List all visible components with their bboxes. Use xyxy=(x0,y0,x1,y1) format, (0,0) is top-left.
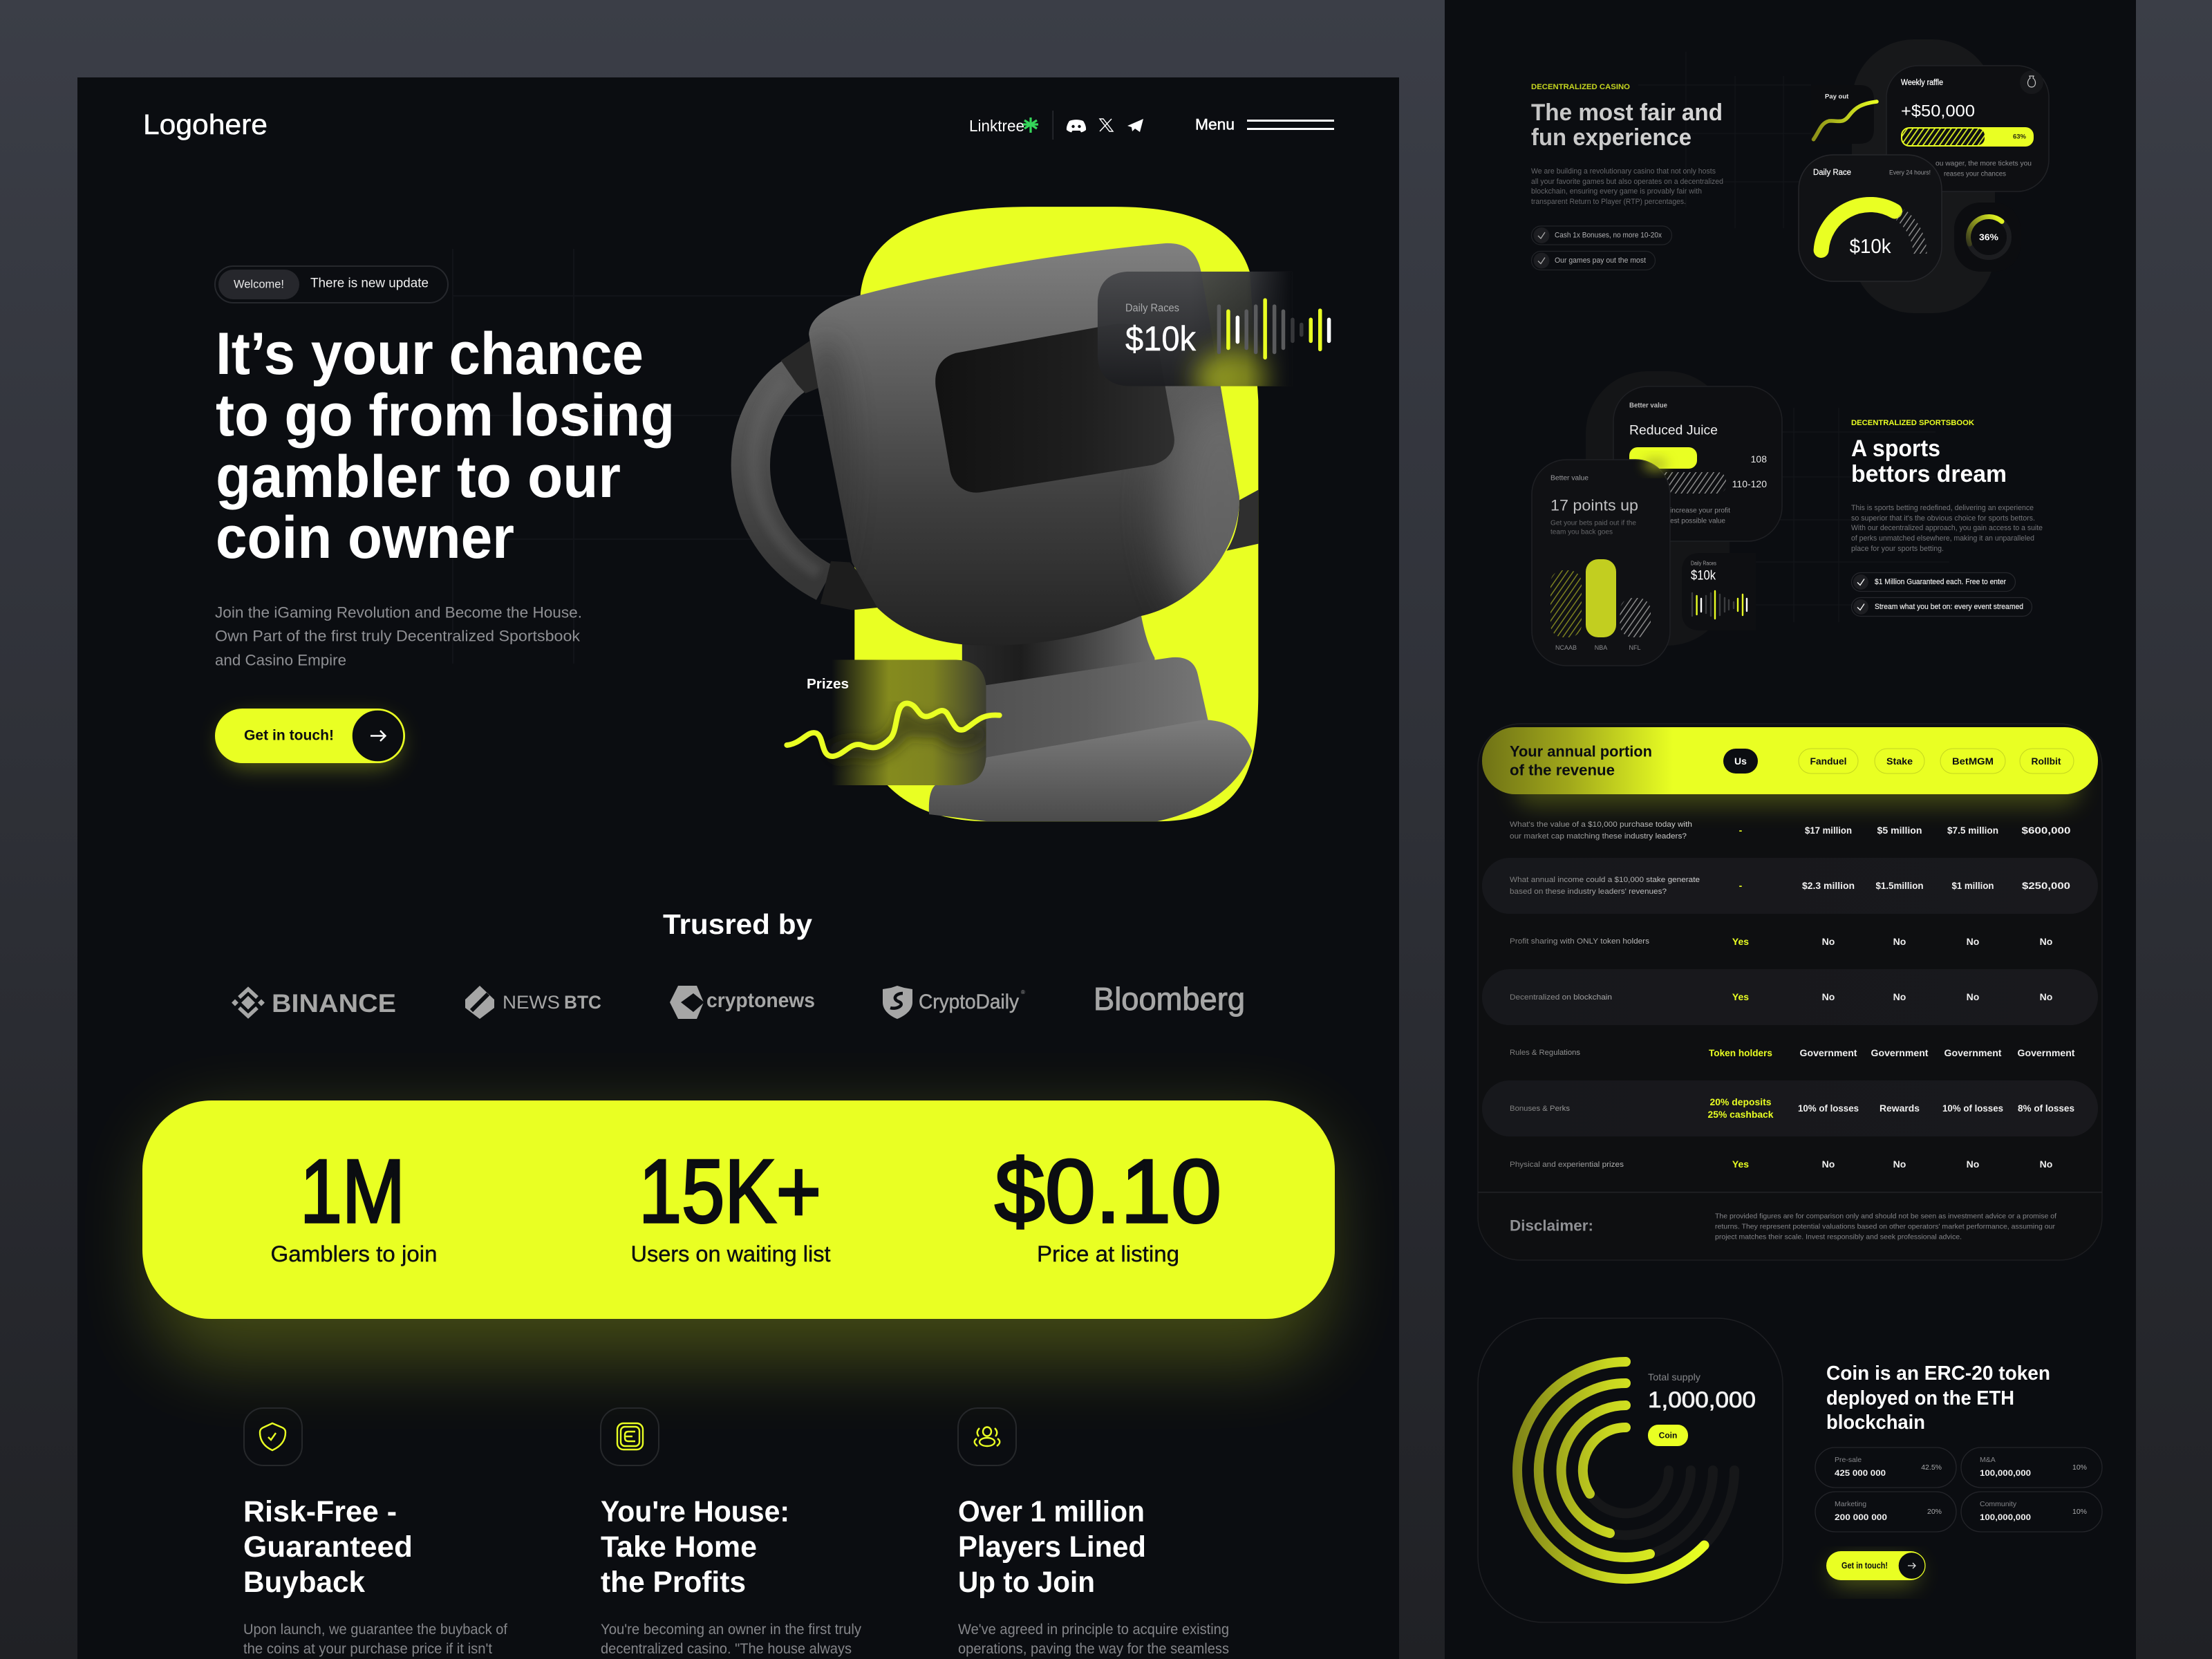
sportsbook paragraph: of perks unmatched elsewhere, making it an unparalleled xyxy=(1851,534,2034,543)
sportsbook heading xyxy=(1851,435,2007,487)
feature: you're house: decentralized casino. "The house always xyxy=(601,1640,852,1657)
casino pill: bonuses: Cash 1x Bonuses, no more 10-20x xyxy=(1555,231,1662,239)
gauge xyxy=(1821,205,1920,254)
sportsbook tag: DECENTRALIZED SPORTSBOOK xyxy=(1851,419,1974,427)
backdrop shape xyxy=(1586,371,1730,646)
prizes wave line xyxy=(787,703,1000,756)
feature: you're house: Take Home xyxy=(601,1530,757,1564)
card: small daily races: $10k xyxy=(1691,568,1716,583)
competitor column values: 10% of losses xyxy=(1942,1103,2003,1114)
card: 17 points up: Get your bets paid out if the xyxy=(1550,520,1636,527)
us column values: Yes xyxy=(1732,936,1749,947)
competitor column values: No xyxy=(2040,991,2052,1002)
logo: cryptodaily xyxy=(883,986,1025,1019)
daily races label: $10k xyxy=(1125,319,1197,358)
linktree link: Linktree xyxy=(969,117,1024,135)
disclaimer xyxy=(1510,1212,2056,1241)
sportsbook pill: guaranteed: $1 Million Guaranteed each. Free to enter xyxy=(1875,578,2006,586)
row labels: our market cap matching these industry leaders? xyxy=(1510,832,1687,841)
logo: newsbtc xyxy=(465,986,601,1019)
disclaimer: The provided figures are for comparison only and should not be seen as investment advice or a promise of xyxy=(1715,1212,2056,1221)
update badge: There is new update xyxy=(310,276,429,290)
feature: one million players: Players Lined xyxy=(958,1530,1146,1564)
backdrop shape xyxy=(1852,39,1995,313)
table header glow xyxy=(1514,764,2081,807)
competitor column values: 8% of losses xyxy=(2018,1103,2074,1114)
competitor column values: $7.5 million xyxy=(1947,825,1998,836)
card: reduced juice: Better value xyxy=(1629,402,1667,409)
icon: x xyxy=(1100,119,1113,131)
token heading xyxy=(1826,1362,2050,1434)
allocation: m&a: M&A xyxy=(1980,1456,1996,1464)
table header: Stake xyxy=(1886,756,1913,767)
row labels: Physical and experiential prizes xyxy=(1510,1161,1624,1169)
hero description: Own Part of the first truly Decentralized Sportsbook xyxy=(215,628,581,644)
card: donut progress: 36% xyxy=(1979,232,1998,242)
bar chart: NBA xyxy=(1595,644,1607,651)
stats panel xyxy=(142,1100,1335,1319)
competitor column values: $17 million xyxy=(1805,825,1852,836)
bar chart: NFL xyxy=(1629,644,1641,651)
us column values xyxy=(1707,825,1774,1170)
card: weekly raffle: +$50,000 xyxy=(1901,102,1975,120)
stat: waiting list: Users on waiting list xyxy=(630,1241,831,1266)
allocation: pre-sale: 42.5% xyxy=(1921,1463,1942,1472)
allocation: marketing xyxy=(1815,1492,1956,1532)
daily races label: Daily Races xyxy=(1125,303,1179,314)
competitor column values: No xyxy=(2040,1159,2052,1170)
card: small daily races xyxy=(1682,553,1756,630)
cta button small: Get in touch! xyxy=(1841,1561,1888,1571)
sportsbook paragraph: This is sports betting redefined, delivering an experience xyxy=(1851,504,2034,512)
competitor column values: $250,000 xyxy=(2022,880,2070,891)
equalizer bars xyxy=(1219,300,1329,357)
ring tracks xyxy=(1590,1470,1734,1554)
update badge: Welcome! xyxy=(234,278,284,290)
sportsbook pill: stream xyxy=(1851,597,2032,617)
competitor column values: No xyxy=(1822,1159,1835,1170)
cta button small xyxy=(1826,1551,1925,1586)
hero heading: coin owner xyxy=(216,505,514,571)
feature: you're house: the Profits xyxy=(601,1566,746,1599)
section: sportsbook copy xyxy=(1851,419,2043,617)
raffle progress bar: 63% xyxy=(2013,133,2027,141)
sportsbook paragraph xyxy=(1851,504,2043,553)
feature: risk-free buyback: Buyback xyxy=(243,1566,365,1599)
allocation: community: 10% xyxy=(2072,1508,2087,1516)
row labels: based on these industry leaders' revenues? xyxy=(1510,888,1667,896)
allocation: m&a xyxy=(1961,1447,2102,1488)
menu xyxy=(1196,119,1334,130)
sportsbook paragraph: so superior that it's the obvious choice for sports bettors. xyxy=(1851,514,2035,523)
casino tag: DECENTRALIZED CASINO xyxy=(1531,83,1630,91)
card: token supply chart: 1,000,000 xyxy=(1648,1387,1756,1412)
allocation: marketing: Marketing xyxy=(1835,1500,1866,1508)
casino pill: payouts: Our games pay out the most xyxy=(1555,256,1646,265)
table rows xyxy=(1482,821,2098,1170)
trophy stem and base xyxy=(929,608,1252,821)
glass card: daily races xyxy=(1098,272,1292,407)
stat: waiting list: 15K+ xyxy=(639,1141,821,1241)
table header: Rollbit xyxy=(2031,756,2061,767)
icon: money bag xyxy=(2020,71,2043,94)
background grid lines xyxy=(453,249,857,664)
logo: Logohere xyxy=(143,109,268,140)
card: token supply chart: Total supply xyxy=(1648,1371,1700,1382)
stat: gamblers: 1M xyxy=(300,1141,405,1241)
allocation: marketing: 200 000 000 xyxy=(1835,1512,1887,1522)
card: reduced juice: 108 xyxy=(1751,453,1767,465)
yellow backdrop xyxy=(854,207,1258,821)
competitor column values: $600,000 xyxy=(2021,825,2071,836)
card: 17 points up xyxy=(1532,458,1670,666)
allocation: m&a: 10% xyxy=(2072,1463,2087,1472)
allocation: community xyxy=(1961,1492,2102,1532)
row labels: What annual income could a $10,000 stake generate xyxy=(1510,876,1700,884)
card: weekly raffle: Weekly raffle xyxy=(1901,79,1943,87)
competitor column values: $1.5million xyxy=(1876,880,1923,891)
competitor column values: No xyxy=(1822,936,1835,947)
casino paragraph xyxy=(1531,167,1723,206)
card: weekly raffle: ou wager, the more tickets you xyxy=(1936,160,2032,167)
linktree link xyxy=(971,118,1038,133)
us column values: Yes xyxy=(1732,1159,1749,1170)
card: weekly raffle: reases your chances xyxy=(1944,170,2006,178)
menu: Menu xyxy=(1195,116,1235,133)
hero description: and Casino Empire xyxy=(215,651,346,669)
card: daily race: $10k xyxy=(1850,236,1891,258)
logo: cryptonews: cryptonews xyxy=(706,989,815,1012)
panel: right column xyxy=(1445,0,2136,1659)
competitor column values: Government xyxy=(1944,1047,2002,1058)
row labels: Bonuses & Perks xyxy=(1510,1105,1571,1113)
row labels xyxy=(1510,821,1700,1169)
feature: you're house: You're becoming an owner in the first truly xyxy=(601,1621,861,1638)
allocation: community: Community xyxy=(1980,1500,2017,1508)
coin badge: Coin xyxy=(1659,1431,1677,1441)
cta button: Get in touch! xyxy=(244,727,334,744)
allocation: marketing: 20% xyxy=(1927,1508,1942,1516)
hero description xyxy=(215,604,582,669)
card: reduced juice xyxy=(1613,386,1782,541)
table header: BetMGM xyxy=(1952,756,1994,767)
coin badge xyxy=(1648,1425,1688,1446)
background grid lines xyxy=(1638,52,1949,622)
card: 17 points up: team you back goes xyxy=(1550,528,1613,536)
table header: of the revenue xyxy=(1510,762,1615,778)
icon: discord xyxy=(1067,120,1086,133)
section: casino copy xyxy=(1531,83,1723,270)
stat: gamblers xyxy=(271,1141,437,1266)
disclaimer: project matches their scale. Invest responsibly and seek professional advice. xyxy=(1715,1233,1962,1241)
table header: Your annual portion xyxy=(1510,742,1652,760)
competitor column values: No xyxy=(1822,991,1835,1002)
casino heading: fun experience xyxy=(1531,124,1691,151)
allocation: pre-sale xyxy=(1815,1447,1956,1488)
trophy illustration xyxy=(751,207,1329,821)
competitor column values: Rewards xyxy=(1880,1103,1920,1114)
us column values: - xyxy=(1739,825,1743,836)
us column values: Yes xyxy=(1732,991,1749,1002)
disclaimer: returns. They represent potential valuations based on other operators' market performance, assuming our xyxy=(1715,1224,2056,1230)
trophy handles xyxy=(751,339,1258,610)
token heading: blockchain xyxy=(1826,1412,1925,1434)
competitor column values: Government xyxy=(1800,1047,1857,1058)
us column values: Token holders xyxy=(1709,1047,1772,1058)
token heading: Coin is an ERC-20 token xyxy=(1826,1362,2050,1385)
sportsbook heading: bettors dream xyxy=(1851,461,2007,487)
us column values: 25% cashback xyxy=(1707,1109,1774,1120)
card: daily race: Daily Race xyxy=(1813,169,1851,177)
row labels: What's the value of a $10,000 purchase today with xyxy=(1510,821,1692,829)
hero heading: It’s your chance xyxy=(216,321,644,387)
allocation: community: 100,000,000 xyxy=(1980,1512,2031,1522)
casino paragraph: We are building a revolutionary casino that not only hosts xyxy=(1531,167,1716,176)
feature: one million players: operations, paving the way for the seamless xyxy=(958,1640,1229,1657)
table header: Fanduel xyxy=(1810,756,1847,767)
logo: binance: BINANCE xyxy=(272,989,396,1018)
feature: you're house xyxy=(601,1408,861,1657)
competitor column values: $2.3 million xyxy=(1802,880,1855,891)
card: reduced juice: Reduced Juice xyxy=(1629,423,1718,438)
icon: coin xyxy=(617,1423,643,1450)
prizes label: Prizes xyxy=(807,677,849,692)
card: donut progress xyxy=(1954,203,2021,272)
competitor column values: No xyxy=(1967,936,1979,947)
icon: shield xyxy=(260,1423,285,1450)
partner logos xyxy=(232,981,1245,1019)
row labels: Profit sharing with ONLY token holders xyxy=(1510,937,1650,946)
card: weekly raffle xyxy=(1886,66,2049,191)
competitor column values xyxy=(1798,825,2075,1170)
casino pill: bonuses xyxy=(1532,226,1671,245)
allocation: m&a: 100,000,000 xyxy=(1980,1468,2031,1478)
casino heading: The most fair and xyxy=(1531,100,1723,126)
cta button xyxy=(215,709,405,767)
sportsbook paragraph: With our decentralized approach, you gain access to a suite xyxy=(1851,524,2043,532)
row labels: Rules & Regulations xyxy=(1510,1049,1581,1057)
casino paragraph: transparent Return to Player (RTP) percentages. xyxy=(1531,198,1686,206)
trophy cup xyxy=(809,243,1239,646)
stat: price: $0.10 xyxy=(995,1141,1221,1241)
sportsbook heading: A sports xyxy=(1851,435,1940,462)
hero heading: gambler to our xyxy=(216,444,621,510)
competitor column values: No xyxy=(1893,991,1906,1002)
section: sportsbook widgets xyxy=(1532,371,1782,666)
feature: one million players: We've agreed in principle to acquire existing xyxy=(958,1621,1229,1638)
card: token supply chart xyxy=(1478,1318,1783,1622)
feature: risk-free buyback: Risk-Free - xyxy=(243,1495,397,1528)
competitor column values: Government xyxy=(1871,1047,1929,1058)
us column values: 20% deposits xyxy=(1710,1096,1772,1107)
token heading: deployed on the ETH xyxy=(1826,1387,2014,1409)
daily races label xyxy=(1125,303,1197,358)
competitor column values: No xyxy=(1967,1159,1979,1170)
panel: main landing page xyxy=(77,77,1399,1659)
competitor column values: No xyxy=(1893,936,1906,947)
competitor column values: Government xyxy=(2017,1047,2075,1058)
competitor column values: No xyxy=(1967,991,1979,1002)
logo: bloomberg: Bloomberg xyxy=(1094,981,1245,1017)
ring arcs xyxy=(1517,1362,1705,1579)
trophy plate xyxy=(935,324,1174,493)
feature: risk-free buyback: Upon launch, we guarantee the buyback of xyxy=(243,1621,507,1638)
feature: one million players: Up to Join xyxy=(958,1566,1095,1599)
stat: price: Price at listing xyxy=(1037,1241,1179,1266)
logo: newsbtc: BTC xyxy=(564,992,601,1013)
card: small daily races: Daily Races xyxy=(1691,560,1716,567)
sportsbook pill: stream: Stream what you bet on: every event streamed xyxy=(1875,603,2023,611)
card: daily race: Every 24 hours! xyxy=(1889,169,1931,177)
update badge xyxy=(215,266,448,303)
disclaimer: Disclaimer: xyxy=(1510,1217,1593,1235)
header navigation xyxy=(143,109,1334,140)
logo: cryptonews xyxy=(670,986,815,1019)
raffle progress bar xyxy=(1901,127,2034,147)
bar chart: NCAAB xyxy=(1555,644,1577,651)
competitor column values: 10% of losses xyxy=(1798,1103,1859,1114)
table header: Us xyxy=(1734,756,1747,767)
comparison table xyxy=(1478,724,2102,1260)
card: reduced juice: est possible value xyxy=(1670,517,1725,525)
hero heading: to go from losing xyxy=(216,382,675,449)
glass card: prizes xyxy=(818,659,986,785)
competitor column values: No xyxy=(1893,1159,1906,1170)
icon: people xyxy=(975,1427,1000,1446)
logo: newsbtc: NEWS xyxy=(503,992,560,1013)
hero heading xyxy=(216,321,675,571)
feature: risk-free buyback: the coins at your purchase price if it isn't xyxy=(243,1640,492,1657)
competitor column values: $5 million xyxy=(1877,825,1922,836)
feature: risk-free buyback xyxy=(243,1408,507,1657)
card: reduced juice: 110-120 xyxy=(1732,478,1767,489)
card: pay out: Pay out xyxy=(1825,93,1849,101)
feature: one million players: Over 1 million xyxy=(958,1495,1145,1528)
icon: telegram xyxy=(1127,119,1143,132)
casino paragraph: blockchain, ensuring every game is provably fair with xyxy=(1531,187,1702,196)
hero description: Join the iGaming Revolution and Become the House. xyxy=(215,604,582,621)
sportsbook paragraph: place for your sports betting. xyxy=(1851,545,1944,553)
section: token copy xyxy=(1815,1362,2102,1586)
card: pay out xyxy=(1811,85,1877,144)
card: 17 points up: 17 points up xyxy=(1550,496,1638,514)
card: 17 points up: Better value xyxy=(1550,474,1588,482)
allocation: pre-sale: 425 000 000 xyxy=(1835,1468,1886,1478)
us column values: - xyxy=(1739,880,1743,891)
casino heading xyxy=(1531,100,1723,151)
allocation: pre-sale: Pre-sale xyxy=(1835,1456,1862,1464)
stat: gamblers: Gamblers to join xyxy=(271,1241,437,1266)
stats panel glow xyxy=(152,1120,1327,1362)
logo: cryptodaily: CryptoDaily xyxy=(919,991,1019,1013)
casino pill: payouts xyxy=(1532,252,1655,270)
feature: you're house: You're House: xyxy=(601,1495,789,1528)
competitor column values: No xyxy=(2040,936,2052,947)
logo: cryptodaily: ® xyxy=(1021,989,1025,995)
row labels: Decentralized on blockchain xyxy=(1510,993,1612,1002)
trusted by heading: Trusred by xyxy=(663,908,812,940)
card: reduced juice: increase your profit xyxy=(1670,507,1730,514)
feature: risk-free buyback: Guaranteed xyxy=(243,1530,413,1564)
feature: one million players xyxy=(958,1408,1229,1657)
table header xyxy=(1482,727,2098,794)
competitor column values: $1 million xyxy=(1952,880,1994,891)
section: casino widgets xyxy=(1799,39,2049,313)
casino paragraph: all your favorite games but also operates on a decentralized xyxy=(1531,178,1723,186)
sportsbook pill: guaranteed xyxy=(1851,572,2016,592)
card: daily race xyxy=(1799,155,1942,281)
bar chart xyxy=(1550,559,1651,651)
